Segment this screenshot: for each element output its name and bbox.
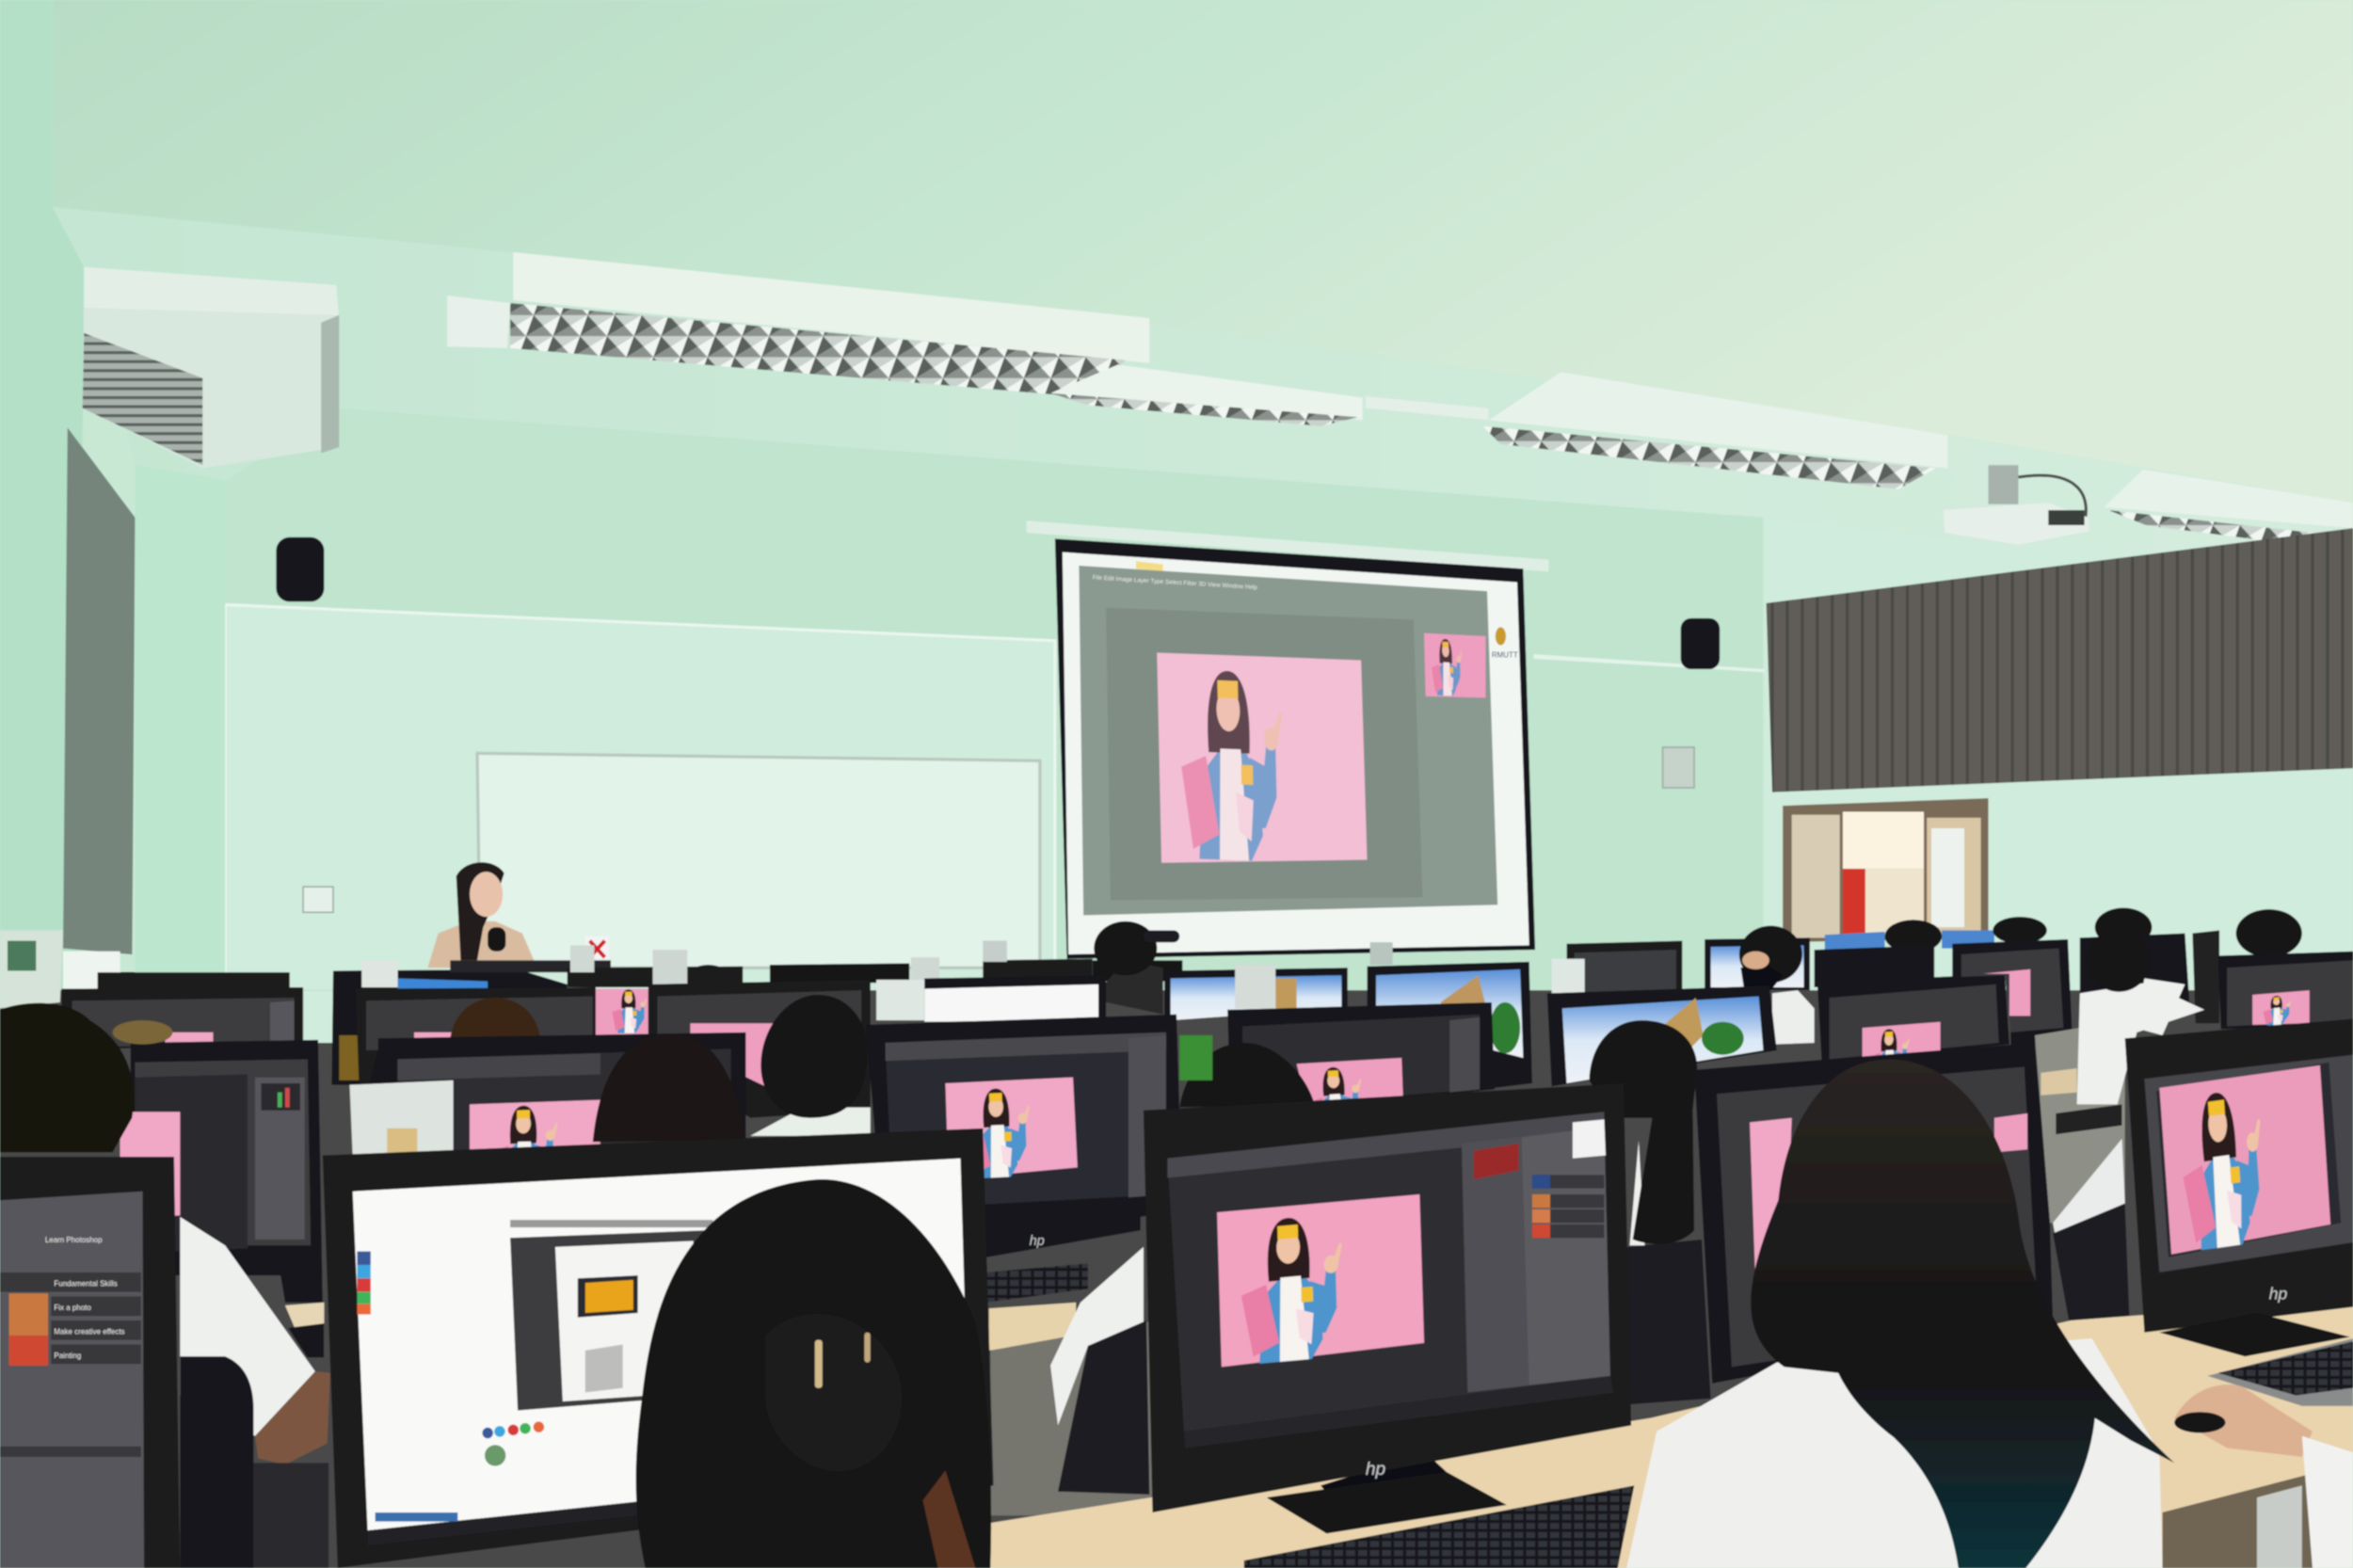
- projected photo: [1157, 653, 1367, 863]
- monitor: browser foreground: [323, 1128, 993, 1568]
- right wall: [1763, 518, 2353, 998]
- monitor: far-left back: [61, 987, 303, 1050]
- wall gap between monitors: [303, 990, 333, 1043]
- projector: [1944, 465, 2089, 545]
- desk left strip: [285, 1303, 324, 1358]
- monitor: row four centre with HP logo: [866, 1015, 1182, 1260]
- left wall: [0, 0, 84, 998]
- wall rail right of screen: [1533, 654, 1765, 672]
- monitor: desktop wallpaper left: [1164, 965, 1348, 1020]
- student with bob hair: [750, 995, 871, 1136]
- pillar: [135, 465, 225, 998]
- wall socket box: [1663, 747, 1694, 788]
- chair rear right: [2056, 1104, 2121, 1134]
- blonde hair sliver: [113, 1020, 172, 1045]
- monitor stand centre: [1267, 1452, 1507, 1533]
- thermostat on left wall: [0, 930, 120, 1008]
- monitor: back far right: [1952, 939, 2073, 1048]
- monitor: far-left foreground: Painting: [54, 1352, 81, 1360]
- monitor-side taskbar icons: [376, 1512, 457, 1522]
- man seated right: [2077, 929, 2204, 1104]
- monitor: row four centre-left: [378, 1032, 745, 1194]
- projector screen housing: [1027, 520, 1548, 571]
- student left foreground head: [0, 1003, 134, 1152]
- social share buttons: [357, 1252, 371, 1315]
- ceiling light centre: [1366, 372, 1948, 489]
- monitor: far right foreground: [2125, 1019, 2353, 1333]
- monitor: browser row two: [876, 975, 1106, 1023]
- monitor: far-left foreground: Fix a photo: [54, 1304, 91, 1312]
- chair dark below: [253, 1463, 328, 1568]
- share icons row: [482, 1421, 544, 1438]
- monitor: far-left foreground: Fundamental Skills: [54, 1279, 118, 1288]
- monitor: far-left foreground: Make creative effects: [54, 1327, 125, 1336]
- right side panels: [1462, 1127, 1610, 1392]
- ceiling soffit: [53, 0, 2353, 503]
- recessed ceiling band: [53, 207, 2353, 585]
- keyboard row four: [986, 1263, 1088, 1303]
- white sleeve: [2302, 1436, 2353, 1568]
- keyboard right: [2207, 1338, 2353, 1406]
- red cross sign: [585, 936, 609, 962]
- man in mask: [1739, 926, 1815, 1045]
- monitor: row four left: [120, 1040, 323, 1303]
- hair: student row two: [450, 998, 540, 1038]
- under-desk shadow and legs: [2163, 1463, 2353, 1568]
- monitor stand right: [2159, 1313, 2350, 1356]
- floor segment: [990, 1320, 1156, 1515]
- HP logo: hp: [1366, 1460, 1386, 1480]
- student foreground hair with clips: [636, 1179, 991, 1568]
- desk strip right: [2041, 1068, 2077, 1096]
- back row seated heads: [687, 908, 2302, 989]
- HP logo: hp: [2269, 1285, 2287, 1304]
- thumbnail photo: [1424, 633, 1485, 697]
- HP logo: hp: [1030, 1234, 1045, 1249]
- keyboard centre: [1244, 1485, 1634, 1568]
- monitor: back corner: [2080, 930, 2219, 1023]
- desk segment: [989, 1303, 1076, 1351]
- taskbar: [1184, 1376, 1613, 1448]
- white popup: [1573, 1119, 1606, 1159]
- chair foreground left: [180, 1356, 253, 1568]
- monitor: back right wallpaper: [1705, 937, 1810, 990]
- monitor: row three centre-right: [1227, 1002, 1495, 1134]
- ponytail student: [1589, 1020, 1697, 1245]
- monitor: ponytail student chair: [1626, 1240, 1711, 1404]
- monitor: dark back right: [1552, 941, 1682, 997]
- monitor: centre foreground: [1144, 1083, 1631, 1512]
- speaker left: [276, 537, 324, 601]
- monitor: right centre behind long-hair student: [1694, 1043, 2053, 1384]
- paper sign: [349, 1080, 454, 1156]
- grass strip on wallpaper: [1179, 1035, 1212, 1080]
- projection screen: [1055, 538, 1535, 959]
- back row monitors: [98, 930, 1994, 1088]
- chair centre: [1058, 1320, 1149, 1495]
- monitor: far-left foreground: [0, 1157, 180, 1568]
- author avatar: [485, 1445, 505, 1466]
- monitor: row three right: [1817, 974, 2009, 1081]
- white shirt: [1626, 1338, 2163, 1568]
- pink photo with woman: [1217, 1194, 1424, 1367]
- man with cap: [1093, 921, 1179, 1015]
- air conditioner: [83, 267, 339, 468]
- right side back floor: [2035, 1020, 2125, 1223]
- lower room backdrop: [0, 990, 2353, 1568]
- monitor: far-left foreground: Learn Photoshop: [45, 1236, 103, 1244]
- chair right: [2053, 1204, 2129, 1323]
- Photoshop canvas: [1106, 608, 1422, 901]
- presenter: [427, 862, 537, 968]
- lower wall panel: [225, 604, 1055, 998]
- student hair centre: [1179, 1043, 1315, 1108]
- ceiling light left: [447, 252, 1363, 426]
- monitor: dark row: [1815, 945, 1934, 987]
- whiteboard: [477, 753, 1040, 968]
- monitor: desktop wallpaper centre: [1367, 962, 1532, 1088]
- student with long teal-tipped hair: [1626, 1060, 2174, 1568]
- white shirt behind monitor: [2053, 1139, 2125, 1238]
- Photoshop window: [1079, 566, 1497, 915]
- long hair: [1751, 1060, 2174, 1568]
- monitor: row two centre: [648, 980, 871, 1118]
- monitor: row two left: [356, 987, 596, 1118]
- student hair centre-left: [593, 1033, 745, 1142]
- desk right foreground: [990, 1300, 2353, 1568]
- thermostat panel: [303, 887, 333, 912]
- speaker right: [1681, 618, 1720, 669]
- monitor: pink photo thumbnail: [596, 989, 648, 1038]
- university logo: RMUTT: [1492, 650, 1518, 659]
- ceiling light right: [2104, 470, 2353, 552]
- university logo: [1492, 627, 1518, 659]
- learn panel rows: [1532, 1175, 1604, 1238]
- article heading: [510, 1220, 712, 1227]
- Photoshop menu: File Edit Image Layer Type Select Filter 3D View Window Help: [1093, 574, 1258, 591]
- back wall: [222, 408, 1763, 998]
- colour picker: [1474, 1144, 1519, 1179]
- hand on mouse: [2174, 1384, 2313, 1457]
- monitor: wallpaper with ponytail student: [1547, 985, 1777, 1086]
- vertical blinds: [1767, 528, 2353, 792]
- paper signs back row: [361, 941, 1393, 990]
- doorway: [1783, 798, 1989, 942]
- embedded page screenshot: [510, 1230, 705, 1411]
- curtain: [63, 427, 135, 954]
- student white shirt centre: [1050, 1247, 1144, 1426]
- browser tab highlight: [1136, 561, 1163, 571]
- monitor: far right row three: [2218, 952, 2353, 1030]
- student left foreground shirt: [180, 1217, 330, 1464]
